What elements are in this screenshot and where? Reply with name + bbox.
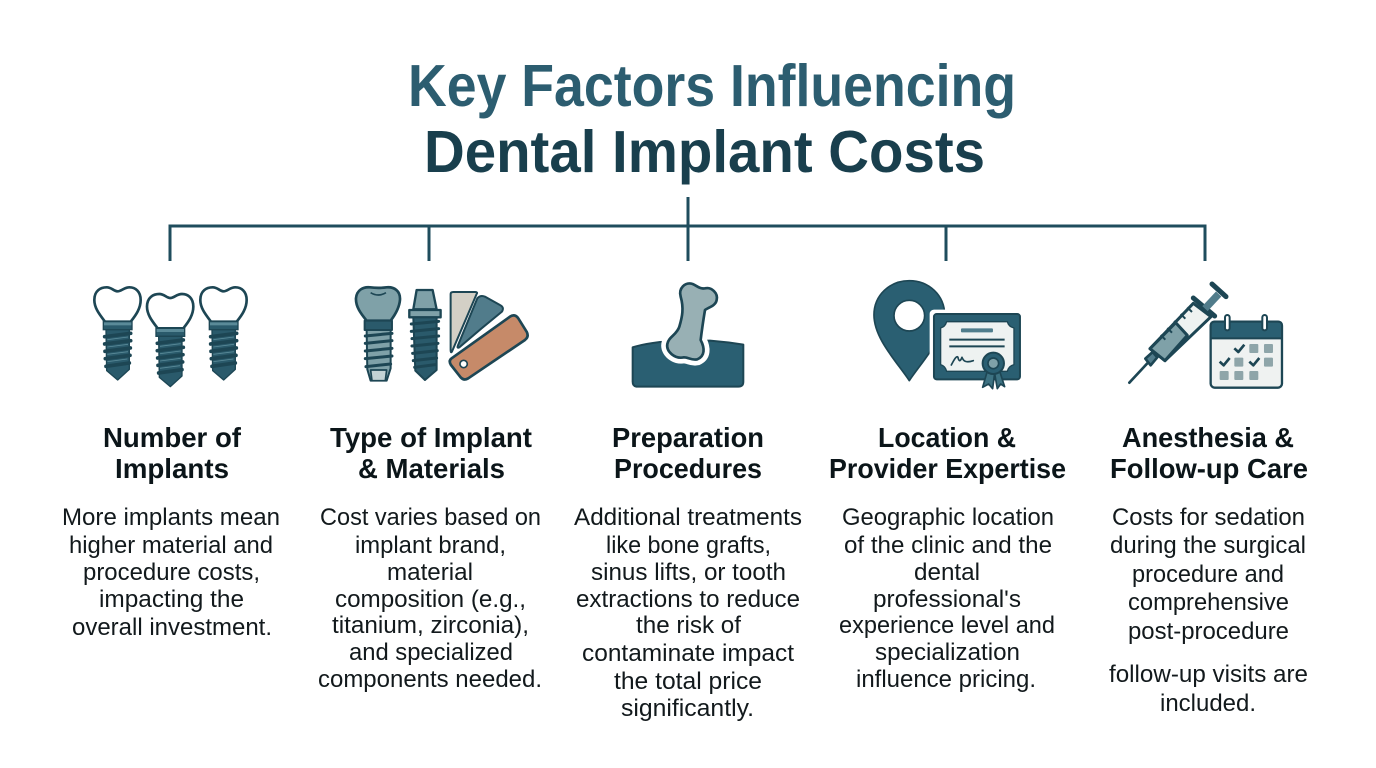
text: location description: of the clinic and the [844,532,1052,559]
heading: anesthesia and follow-up care: Follow-up Care [1110,453,1308,484]
heading: anesthesia and follow-up care: Anesthesia & [1122,422,1294,453]
text: type of implant description: and specialized [349,639,513,666]
text: type of implant description: titanium, zirconia), [332,612,529,639]
text: type of implant description: material [387,559,473,586]
text: type of implant description [318,504,542,693]
icon: three dental implants [94,287,247,387]
icon: location pin and certificate [874,281,1023,389]
text: anesthesia description [1109,504,1308,717]
heading: number of implants: Implants [115,453,229,484]
text: location description: influence pricing. [856,666,1036,693]
text: preparation description: contaminate impact [582,640,794,667]
heading: type of implant: & Materials [358,453,505,484]
text: preparation description: extractions to reduce [576,586,800,613]
heading: location and provider expertise: Provider Expertise [829,453,1066,484]
text: preparation description: sinus lifts, or tooth [591,559,786,586]
text: type of implant description: components needed. [318,666,542,693]
text: location description: dental [914,559,980,586]
title [408,53,1016,185]
text: preparation description: Additional treatments [574,504,802,531]
heading: number of implants [103,422,242,484]
text: anesthesia description: during the surgical [1110,532,1306,559]
text: location description [839,504,1055,693]
text: anesthesia description: comprehensive [1128,589,1289,616]
text: preparation description: the risk of [636,612,741,639]
text: anesthesia description: included. [1160,690,1256,717]
heading: number of implants: Number of [103,422,242,453]
heading: preparation procedures: Preparation [612,422,764,453]
title: Key Factors Influencing [408,53,1016,119]
text: anesthesia description: Costs for sedation [1112,504,1305,531]
text: type of implant description: implant brand, [355,532,506,559]
text: number of implants description: procedure costs, [83,559,260,586]
text: location description: specialization [875,639,1020,666]
text: anesthesia description: procedure and [1132,561,1284,588]
text: number of implants description [62,504,280,641]
icon: bone graft in jaw [633,284,743,387]
text: anesthesia description: post-procedure [1128,618,1289,645]
panel: anesthesia and follow-up care [1109,422,1308,717]
text: preparation description: the total price [614,668,762,695]
title: Dental Implant Costs [424,119,985,185]
icon: implant parts and material swatches [356,287,528,381]
icon: syringe and calendar [1129,284,1282,388]
panel: preparation procedures [574,422,802,722]
heading: type of implant [330,422,532,484]
connector tree [170,197,1205,261]
heading: type of implant: Type of Implant [330,422,532,453]
text: type of implant description: Cost varies based on [320,504,541,531]
heading: anesthesia and follow-up care [1110,422,1308,484]
text: number of implants description: higher material and [69,532,273,559]
text: preparation description: like bone grafts, [606,532,771,559]
heading: preparation procedures: Procedures [614,453,762,484]
panel: location and provider expertise [829,422,1066,693]
text: location description: professional's [873,586,1021,613]
panel: type of implant and materials [318,422,542,693]
text: type of implant description: composition (e.g., [335,586,526,613]
panel: number of implants [62,422,280,641]
text: number of implants description: overall investment. [72,614,272,641]
text: number of implants description: impacting the [99,586,244,613]
heading: preparation procedures [612,422,764,484]
text: preparation description: significantly. [621,695,754,722]
heading: location and provider expertise: Location & [878,422,1016,453]
heading: location and provider expertise [829,422,1066,484]
text: location description: experience level and [839,612,1055,639]
text: location description: Geographic location [842,504,1054,531]
text: anesthesia description: follow-up visits are [1109,661,1308,688]
text: number of implants description: More implants mean [62,504,280,531]
text: preparation description [574,504,802,722]
